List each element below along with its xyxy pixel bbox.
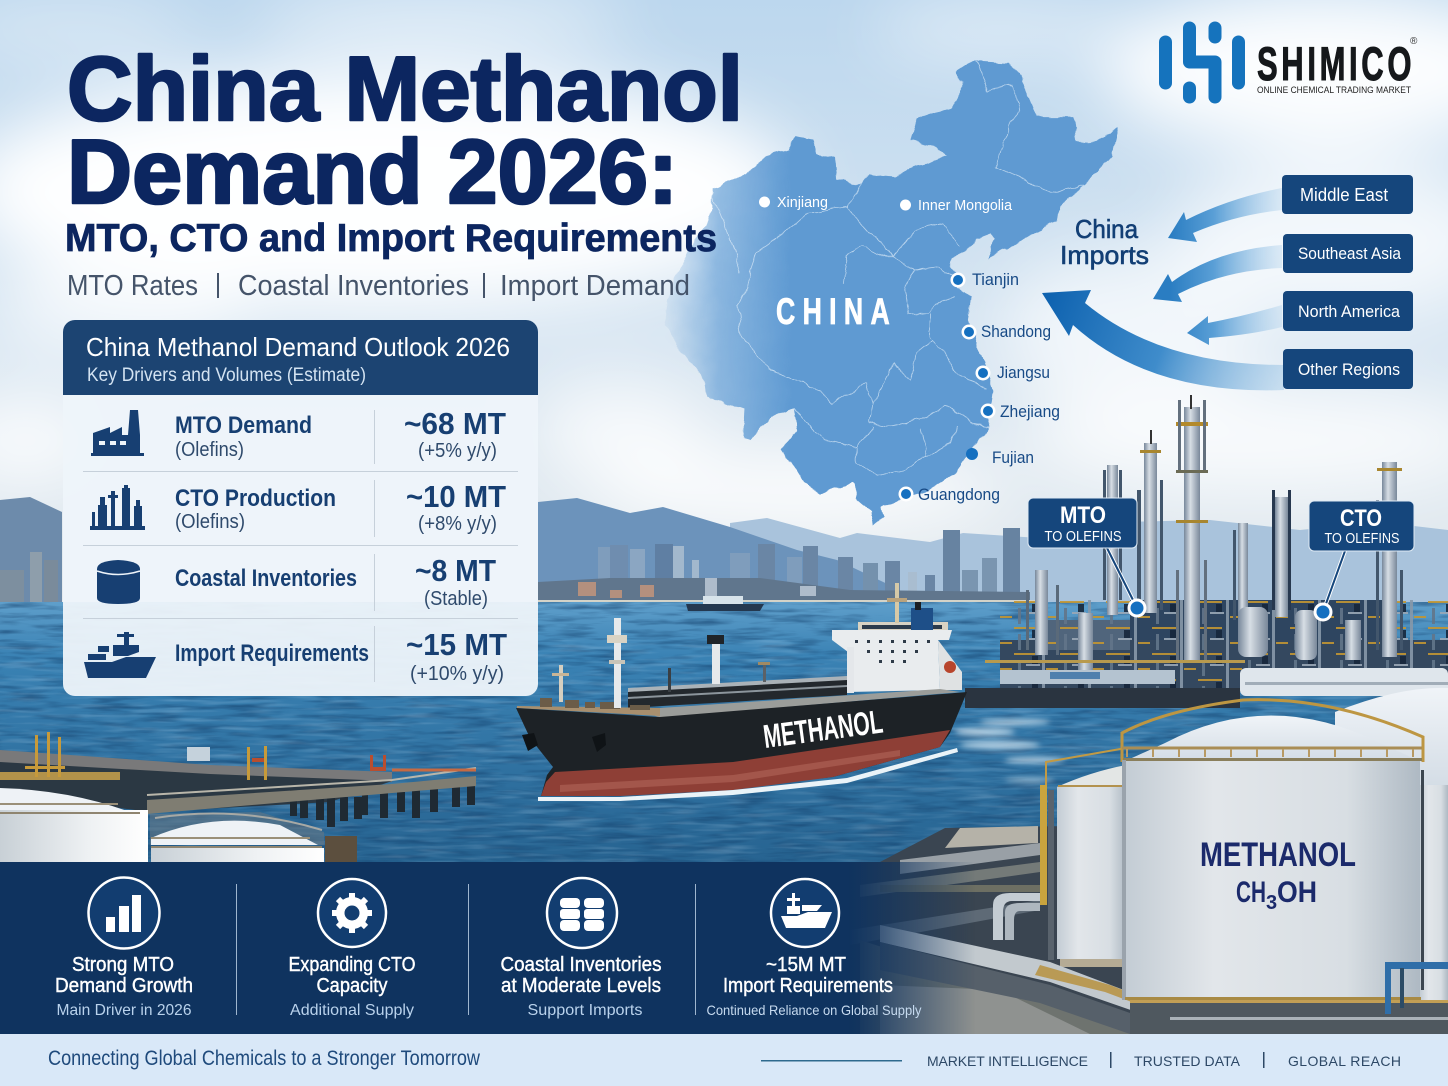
icon: white ship (771, 879, 839, 947)
takeaway: MTO growth: Demand Growth (55, 975, 193, 997)
row: coastal inventories (97, 553, 496, 610)
source region labels (1282, 175, 1413, 389)
takeaway: MTO growth: Main Driver in 2026 (56, 1002, 192, 1019)
inland markers: Xinjiang (777, 194, 828, 211)
takeaway: inventories (500, 878, 662, 1019)
arrow: Other Regions (1042, 290, 1284, 390)
title: Demand 2026: (67, 122, 678, 223)
row: import requirements (84, 627, 507, 685)
icon: bar chart (88, 878, 160, 948)
logo: SHIMICO: ONLINE CHEMICAL TRADING MARKET (1257, 85, 1411, 96)
topic strip (67, 270, 690, 302)
coastal markers: Fujian (992, 448, 1034, 467)
coastal markers: Shandong (981, 322, 1051, 341)
row: import requirements: (+10% y/y) (410, 663, 504, 685)
row: coastal inventories: ~8 MT (415, 553, 496, 588)
main methanol tank (1122, 700, 1448, 1034)
red boot topping (541, 730, 950, 796)
arrow: Southeast Asia (1153, 245, 1282, 302)
takeaway: imports: Import Requirements (723, 975, 893, 997)
footer bar: GLOBAL REACH (1288, 1053, 1401, 1069)
secondary tank (1040, 748, 1127, 960)
title (65, 39, 743, 260)
label: Other Regions: Other Regions (1298, 360, 1400, 379)
row: MTO demand: (Olefins) (175, 439, 244, 461)
row: CTO production (90, 479, 506, 535)
row: MTO demand (91, 406, 506, 462)
row: import requirements: ~15 MT (406, 627, 507, 662)
tanker ship (516, 583, 967, 801)
background: sea (0, 602, 1448, 872)
logo: SHIMICO (1166, 28, 1418, 97)
left-hand pier (0, 732, 476, 866)
row: import requirements: Import Requirements (175, 640, 369, 667)
logo: SHIMICO: SHIMICO (1257, 39, 1411, 91)
refinery complex (965, 395, 1448, 708)
wake (538, 748, 958, 801)
footer bar: Connecting Global Chemicals to a Stronger Tomorrow (48, 1047, 481, 1070)
coastal markers: Zhejiang (1000, 402, 1060, 421)
takeaway: inventories: Support Imports (528, 1002, 642, 1019)
tank label: 3 (1266, 892, 1277, 914)
row: CTO production: CTO Production (175, 485, 336, 512)
logo: SHIMICO: ® (1410, 36, 1418, 47)
footer bar: MARKET INTELLIGENCE (927, 1053, 1088, 1069)
tank label (1200, 836, 1356, 914)
deck equipment (517, 618, 960, 718)
inland markers: Inner Mongolia (918, 197, 1013, 214)
superstructure (832, 583, 962, 692)
callout: CTO (1309, 501, 1414, 622)
panel header: Key Drivers and Volumes (Estimate) (87, 365, 366, 386)
subtitle: MTO, CTO and Import Requirements (65, 217, 717, 260)
label: North America (1283, 291, 1413, 331)
tank label: CH (1236, 876, 1266, 909)
arrow: North America (1187, 305, 1282, 345)
ship name: METHANOL (761, 703, 885, 755)
panel header: China Methanol Demand Outlook 2026 (86, 332, 510, 362)
logo mark (1166, 28, 1238, 97)
background: city skyline (0, 528, 1038, 603)
heading: China Imports: Imports (1060, 240, 1149, 270)
label: North America: North America (1298, 302, 1401, 321)
icon: storage tank (97, 560, 140, 604)
row: coastal inventories: Coastal Inventories (175, 565, 357, 592)
takeaway: CTO capacity (288, 879, 416, 1019)
row: CTO production: (+8% y/y) (418, 513, 497, 535)
takeaway: inventories: at Moderate Levels (501, 975, 661, 997)
row: MTO demand: (+5% y/y) (418, 440, 497, 462)
coastal markers: Guangdong (918, 485, 1000, 504)
anchor (522, 733, 606, 752)
icon: distillation columns (90, 485, 145, 530)
inland markers (759, 194, 1013, 214)
icon: drums (547, 878, 617, 948)
coastal markers (898, 270, 1060, 504)
tank label: METHANOL (1200, 836, 1356, 874)
takeaway: CTO capacity: Capacity (316, 975, 388, 997)
tank label: OH (1277, 876, 1317, 909)
background: sky with clouds (0, 0, 1448, 620)
left-hand storage tanks (0, 788, 324, 864)
label: Southeast Asia: Southeast Asia (1298, 244, 1401, 263)
arrow: Middle East (1168, 188, 1282, 242)
icon: factory (91, 410, 144, 456)
label: Southeast Asia (1283, 234, 1413, 273)
coastal markers: Jiangsu (997, 363, 1050, 382)
takeaway: CTO capacity: Expanding CTO (288, 954, 416, 976)
panel: demand outlook (63, 320, 538, 696)
footer bar: TRUSTED DATA (1134, 1053, 1241, 1069)
background: distant mountains (0, 497, 1448, 610)
panel header (63, 320, 538, 395)
callout: CTO: TO OLEFINS (1324, 530, 1400, 547)
takeaway: MTO growth: Strong MTO (72, 954, 174, 976)
row: MTO demand: ~68 MT (404, 406, 506, 441)
icon: gear (318, 879, 386, 947)
takeaway: CTO capacity: Additional Supply (290, 1002, 414, 1019)
row: CTO production: ~10 MT (406, 479, 506, 514)
takeaway: imports: ~15M MT (766, 954, 846, 976)
footer bar (0, 1034, 1448, 1086)
foreground foam, right of ship (955, 719, 1065, 782)
topic strip: Import Demand (500, 270, 690, 302)
heading: China Imports: China (1075, 214, 1138, 244)
topic strip: Coastal Inventories (238, 270, 469, 302)
label: Middle East (1282, 175, 1413, 214)
hull (516, 692, 967, 796)
row: MTO demand: MTO Demand (175, 412, 312, 439)
takeaway: MTO growth (55, 878, 193, 1019)
row: CTO production: (Olefins) (175, 511, 245, 533)
takeaway: inventories: Coastal Inventories (500, 954, 662, 976)
coastal markers: Tianjin (972, 270, 1019, 289)
distant ferry (686, 596, 764, 611)
takeaway: imports: Continued Reliance on Global Supply (706, 1002, 922, 1018)
bottom takeaway band (0, 862, 975, 1034)
map name: CHINA (776, 291, 890, 332)
lower right: pipe yard (780, 825, 1240, 1034)
icon: cargo ship (84, 632, 156, 678)
label: Other Regions (1283, 349, 1413, 389)
rear tanks, right side (1335, 688, 1448, 1000)
callout: MTO: TO OLEFINS (1044, 528, 1122, 545)
title: China Methanol (67, 39, 743, 140)
takeaway: imports (706, 879, 922, 1018)
row: coastal inventories: (Stable) (424, 588, 488, 610)
heading: China Imports (1060, 214, 1149, 270)
China map (663, 62, 1118, 525)
callout: MTO (1028, 498, 1146, 618)
callout: MTO: MTO (1060, 502, 1106, 529)
topic strip: MTO Rates (67, 270, 198, 302)
callout: CTO: CTO (1340, 505, 1382, 532)
label: Middle East: Middle East (1300, 185, 1388, 205)
